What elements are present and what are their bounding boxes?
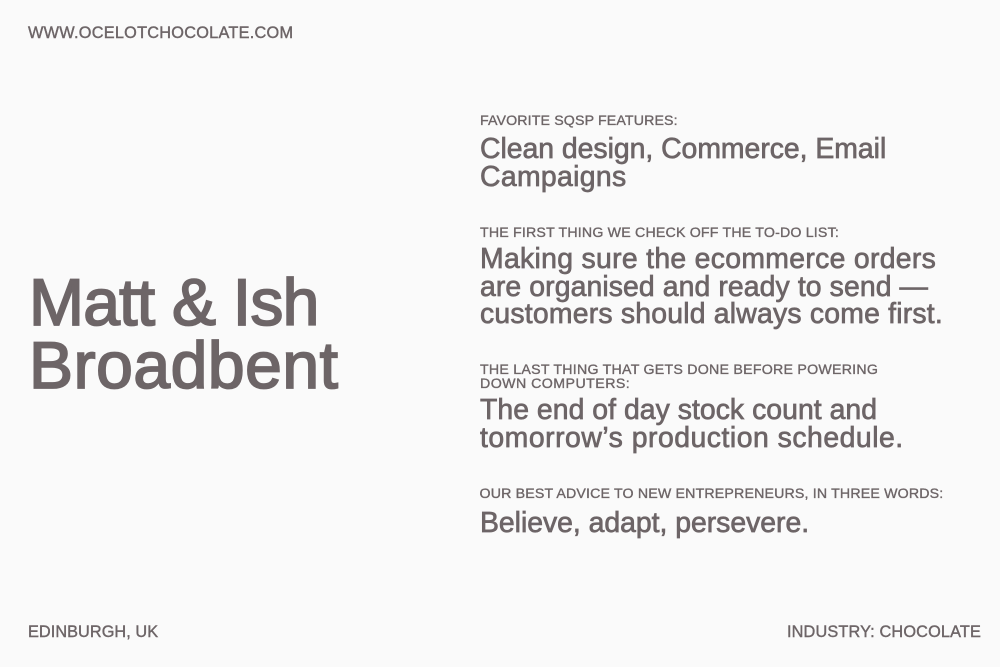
title: name: Broadbent bbox=[29, 328, 339, 402]
answer: favorite features bbox=[480, 133, 886, 192]
answer: last thing: tomorrow’s production schedule. bbox=[480, 422, 904, 454]
title: name: Matt & Ish bbox=[29, 265, 319, 339]
title: name bbox=[29, 265, 339, 402]
answer: first thing: customers should always come first. bbox=[480, 298, 943, 330]
answer: best advice: Believe, adapt, persevere. bbox=[480, 507, 809, 539]
answer: first thing: are organised and ready to send — bbox=[480, 270, 928, 302]
label: best advice: OUR BEST ADVICE TO NEW ENTREPRENEURS, IN THREE WORDS: bbox=[480, 486, 943, 502]
label: last thing: THE LAST THING THAT GETS DONE BEFORE POWERING bbox=[480, 362, 878, 378]
answer: last thing bbox=[480, 394, 904, 454]
industry: INDUSTRY: CHOCOLATE bbox=[787, 623, 981, 641]
website url: WWW.OCELOTCHOCOLATE.COM bbox=[28, 24, 293, 42]
answer: first thing: Making sure the ecommerce orders bbox=[480, 243, 936, 275]
answer: last thing: The end of day stock count and bbox=[480, 394, 877, 426]
label: last thing: DOWN COMPUTERS: bbox=[480, 376, 630, 392]
answer: favorite features: Clean design, Commerce, Email bbox=[480, 133, 886, 165]
location: EDINBURGH, UK bbox=[28, 623, 158, 641]
label: last thing bbox=[480, 362, 878, 392]
label: favorite features: FAVORITE SQSP FEATURES: bbox=[480, 113, 678, 129]
answer: first thing bbox=[480, 243, 943, 330]
answer: favorite features: Campaigns bbox=[480, 160, 627, 192]
label: first thing: THE FIRST THING WE CHECK OFF THE TO-DO LIST: bbox=[480, 225, 839, 241]
